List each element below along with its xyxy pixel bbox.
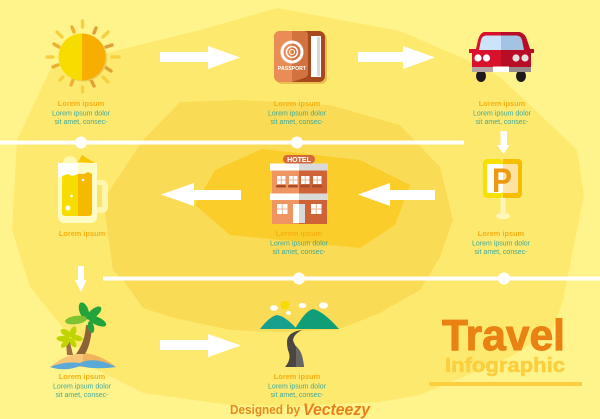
icon: beer mug bbox=[58, 155, 108, 223]
label: parking bbox=[472, 229, 531, 256]
icon: hotel: HOTEL bbox=[287, 157, 312, 164]
icon: parking sign bbox=[483, 159, 522, 219]
label: sun bbox=[52, 99, 111, 126]
title: Travel Infographic bbox=[429, 311, 582, 386]
arrow: sun to passport bbox=[160, 46, 240, 69]
icon: mountains and road bbox=[260, 300, 339, 367]
credit: Designed by Vecteezy bbox=[230, 400, 371, 419]
icon: car bbox=[469, 32, 534, 82]
label: sun: sit amet, consec- bbox=[55, 119, 108, 126]
label: parking: Lorem ipsum bbox=[478, 229, 525, 238]
credit: Designed by Vecteezy: Vecteezy bbox=[303, 400, 371, 419]
label: passport bbox=[268, 99, 327, 126]
icon: passport: PASSPORT bbox=[278, 66, 307, 72]
timeline: lower bbox=[103, 272, 600, 284]
label: island bbox=[53, 372, 112, 399]
arrow: island to road bbox=[160, 334, 241, 357]
icon: hotel bbox=[270, 155, 328, 224]
label: road: sit amet, consec- bbox=[271, 392, 324, 399]
label: car bbox=[473, 99, 532, 126]
label: passport: Lorem ipsum bbox=[274, 99, 321, 108]
label: hotel: Lorem ipsum bbox=[276, 229, 323, 238]
label: passport: Lorem ipsum dolor bbox=[268, 110, 327, 118]
icon: passport bbox=[274, 31, 327, 84]
label: island: Lorem ipsum dolor bbox=[53, 384, 112, 390]
label: road bbox=[268, 372, 327, 399]
label: island: sit amet, consec- bbox=[56, 392, 109, 399]
label: sun: Lorem ipsum bbox=[58, 99, 105, 108]
icon: parking sign: P bbox=[492, 162, 512, 200]
arrow: parking to hotel bbox=[358, 183, 435, 206]
label: road: Lorem ipsum dolor bbox=[268, 384, 327, 390]
label: passport: sit amet, consec- bbox=[271, 119, 324, 126]
label: hotel: sit amet, consec- bbox=[273, 249, 326, 256]
label: sun: Lorem ipsum dolor bbox=[52, 110, 111, 118]
icon: sun bbox=[47, 21, 119, 92]
label: parking: sit amet, consec- bbox=[475, 249, 528, 256]
label: island: Lorem ipsum bbox=[59, 372, 106, 381]
title: Travel Infographic: Travel bbox=[442, 311, 565, 360]
arrow: passport to car bbox=[358, 46, 435, 69]
label: hotel bbox=[270, 229, 329, 256]
credit: Designed by Vecteezy: Designed by bbox=[230, 403, 300, 417]
arrow: hotel to beer bbox=[161, 183, 241, 206]
label: road: Lorem ipsum bbox=[274, 372, 321, 381]
icon: palm island bbox=[50, 301, 116, 369]
label: hotel: Lorem ipsum dolor bbox=[270, 240, 329, 248]
title: Travel Infographic: Infographic bbox=[445, 355, 565, 377]
label: car: Lorem ipsum bbox=[479, 99, 526, 108]
label: car: sit amet, consec- bbox=[476, 119, 529, 126]
label: beer: Lorem ipsum bbox=[59, 229, 106, 238]
timeline: upper bbox=[0, 136, 464, 148]
arrow: car to parking bbox=[497, 131, 510, 154]
label: car: Lorem ipsum dolor bbox=[473, 110, 532, 118]
label: parking: Lorem ipsum dolor bbox=[472, 240, 531, 248]
arrow: beer to island bbox=[75, 266, 86, 292]
